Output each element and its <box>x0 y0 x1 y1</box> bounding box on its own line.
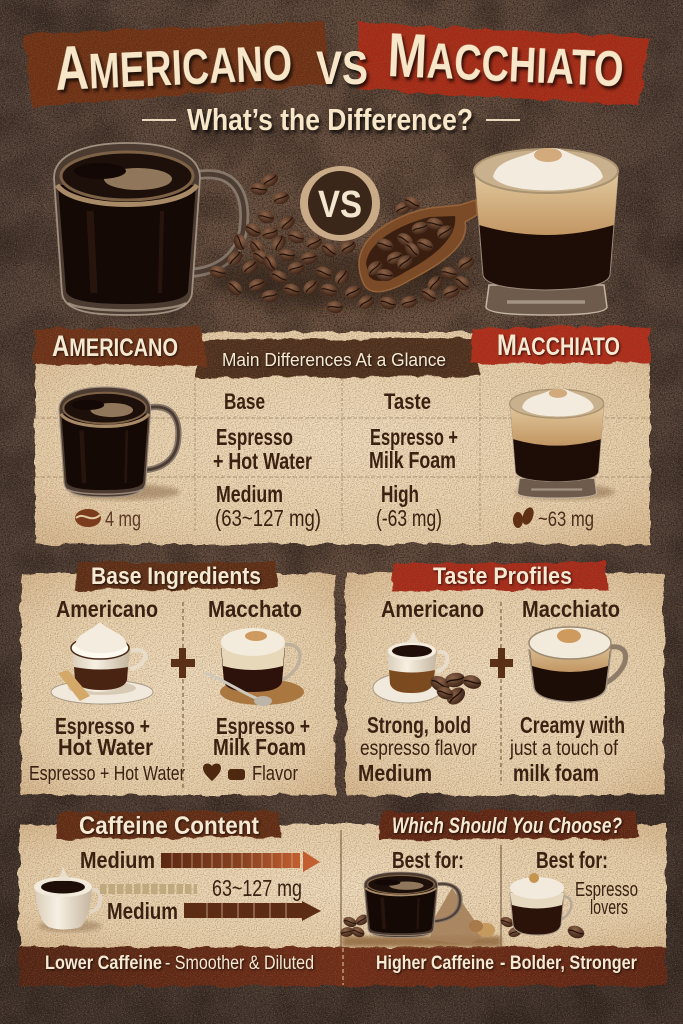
macchiato name: Macchiato <box>522 596 620 622</box>
americano ingredient text: Hot Water <box>58 734 153 760</box>
icon: coffee tag <box>228 769 245 780</box>
icon: macchiato cup with spoon <box>205 628 304 706</box>
hero: americano mug <box>54 143 244 315</box>
macchiato taste text: Creamy with <box>520 712 625 738</box>
bean icon and americano dose <box>75 508 141 531</box>
hero: macchiato glass <box>474 148 618 315</box>
americano caffeine text: Medium <box>216 481 283 507</box>
macchiato small glass with beans <box>499 873 586 941</box>
leaf icon and macchiato dose: ~63 mg <box>538 508 594 531</box>
divider <box>182 602 184 790</box>
divider <box>500 602 502 785</box>
title word macchiato: MACCHIATO <box>386 21 625 100</box>
panel: caffeine and choice <box>19 811 666 986</box>
icon: plus <box>490 648 513 678</box>
caffeine range: 63~127 mg <box>212 875 302 901</box>
strip divider <box>342 948 344 985</box>
macchiato taste text: just a touch of <box>509 737 618 760</box>
arrow: top gradient bar <box>161 851 320 872</box>
macchiato base text: Milk Foam <box>369 447 456 473</box>
macchiato ingredient text: Espresso + <box>216 713 310 739</box>
medium label bottom: Medium <box>107 898 178 924</box>
left verdict: Lower Caffeine <box>45 953 162 974</box>
column dividers <box>341 830 501 947</box>
espresso lovers: lovers <box>590 897 628 919</box>
americano ingredient text <box>29 713 185 785</box>
vs badge: VS <box>318 184 362 226</box>
americano ingredient text: Espresso + Hot Water <box>29 763 185 785</box>
macchiato taste text <box>509 712 625 786</box>
icon: plus <box>171 648 195 678</box>
americano mug <box>59 387 180 500</box>
title word vs: VS <box>316 41 368 94</box>
americano with beans and sack <box>339 872 501 947</box>
icon: macchiato glass cup <box>529 627 626 702</box>
americano taste text: Medium <box>358 760 432 786</box>
paper <box>19 824 666 950</box>
best for left: Best for: <box>392 847 464 873</box>
which header: Which Should You Choose? <box>392 813 622 838</box>
macchiato glass <box>510 389 615 500</box>
right verdict: - Bolder, Stronger <box>500 953 638 974</box>
macchiato caffeine text <box>376 481 442 531</box>
bottom strip <box>19 947 666 986</box>
hero: coffee beans and scoop <box>208 171 477 314</box>
americano taste text <box>358 712 477 786</box>
espresso lovers: Espresso <box>575 879 638 901</box>
flavor text: Flavor <box>252 763 298 785</box>
americano caffeine text: (63~127 mg) <box>215 505 321 531</box>
taste label: Taste <box>384 389 431 414</box>
table paper <box>35 332 650 544</box>
macchiato base text <box>369 424 458 473</box>
title banner <box>24 21 648 107</box>
espresso lovers <box>575 879 638 919</box>
title word americano: AMERICANO <box>54 25 293 104</box>
icon: americano cup with beans <box>373 630 483 708</box>
americano base text: + Hot Water <box>213 448 312 474</box>
macchiato title plank <box>358 22 648 105</box>
macchiato taste text: milk foam <box>513 760 599 786</box>
americano name: Americano <box>56 596 158 622</box>
americano name: Americano <box>381 596 484 622</box>
americano ingredient text: Espresso + <box>55 713 150 739</box>
americano taste text: Strong, bold <box>367 712 471 738</box>
paper <box>21 573 335 795</box>
subtitle: What’s the Difference? <box>187 102 473 137</box>
panel: main differences table <box>34 326 650 544</box>
macchiato caffeine text: High <box>381 481 419 507</box>
macchiato caffeine text: (-63 mg) <box>376 505 442 531</box>
center header: Main Differences At a Glance <box>222 350 446 370</box>
americano column tab: AMERICANO <box>52 330 178 363</box>
medium label top: Medium <box>80 847 155 873</box>
macchiato ingredient text: Milk Foam <box>213 734 306 760</box>
right verdict <box>376 953 638 974</box>
header tab: Taste Profiles <box>433 563 572 590</box>
left verdict <box>45 953 314 974</box>
row labels: Base <box>224 389 265 414</box>
vs badge <box>300 166 380 241</box>
arrow: bottom bar <box>184 901 321 921</box>
faded bar <box>100 884 197 894</box>
paper <box>346 573 664 795</box>
icon: heart <box>203 764 221 781</box>
americano caffeine text <box>215 481 321 531</box>
center header <box>197 338 479 378</box>
icon: white cup <box>34 866 102 932</box>
panel: taste profiles <box>346 562 664 795</box>
bean icon and americano dose: 4 mg <box>105 508 141 531</box>
macchato name: Macchato <box>208 596 302 622</box>
macchiato ingredient text <box>213 713 310 760</box>
table grid lines <box>35 378 650 532</box>
panel: base ingredients <box>21 562 335 795</box>
americano taste text: espresso flavor <box>360 737 477 760</box>
right verdict: Higher Caffeine <box>376 953 494 974</box>
macchiato column tab: MACCHIATO <box>497 329 620 362</box>
header tab <box>392 562 607 591</box>
caffeine header: Caffeine Content <box>79 812 260 840</box>
best for right: Best for: <box>536 847 608 873</box>
left verdict: - Smoother & Diluted <box>165 953 314 974</box>
americano base text <box>213 424 312 474</box>
macchiato base text: Espresso + <box>370 424 458 450</box>
icon: americano cup on saucer <box>51 622 153 704</box>
americano base text: Espresso <box>216 424 293 450</box>
leaf icon and macchiato dose <box>513 506 594 531</box>
header tab: Base Ingredients <box>91 563 261 590</box>
americano title plank <box>24 22 328 107</box>
